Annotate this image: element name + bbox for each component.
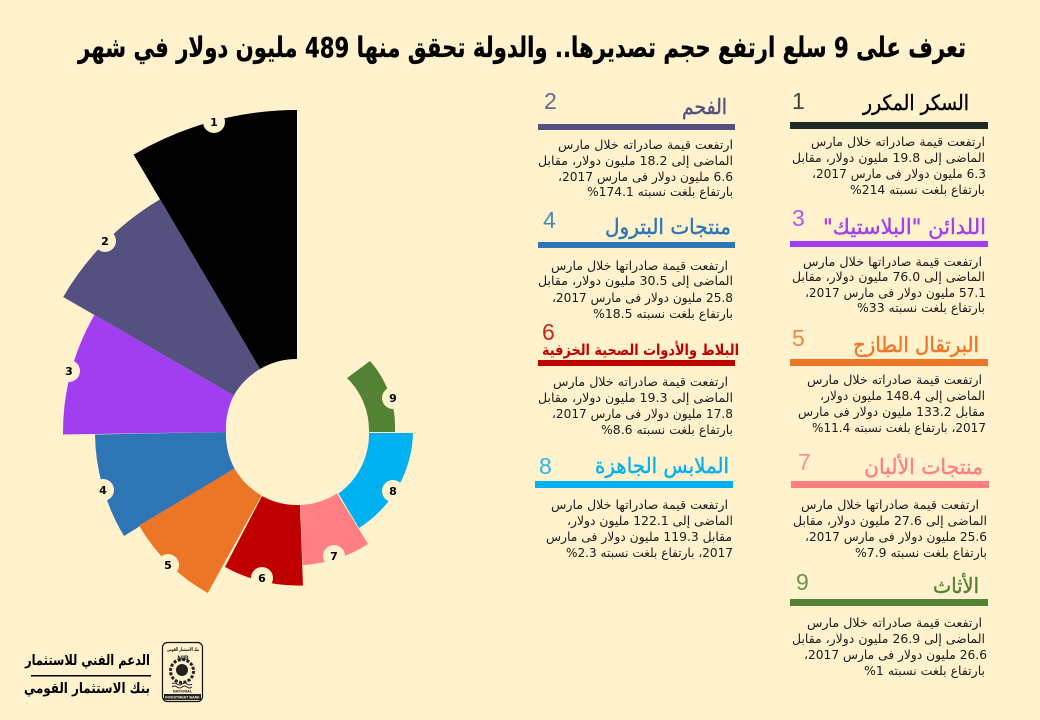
slice 8 <box>338 433 413 528</box>
bar <box>538 124 735 130</box>
text block: 6.3 مليون دولار فى مارس 2017، <box>812 166 986 182</box>
text block: 25.6 مليون دولار فى مارس 2017، <box>805 529 987 545</box>
text block: ارتفعت قيمة صادراته خلال مارس <box>807 615 982 631</box>
text block: ارتفعت قيمة صادراته خلال مارس <box>553 374 728 390</box>
slice 7 <box>300 494 368 565</box>
number: 6 <box>542 319 555 345</box>
text block: 2017، بارتفاع بلغت نسبته 2.3% <box>566 545 733 561</box>
label 9 <box>382 387 404 409</box>
label 3: 3 <box>65 365 73 378</box>
text block: ارتفعت قيمة صادراتها خلال مارس <box>551 497 728 513</box>
heading: الملابس الجاهزة <box>595 454 729 478</box>
text block: 57.1 مليون دولار فى مارس 2017، <box>805 285 986 301</box>
panel: 4 petroleum products <box>538 207 735 322</box>
heading: اللدائن "البلاستيك" <box>823 215 986 239</box>
text block: الماضى إلى 26.9 مليون دولار، مقابل <box>792 631 985 647</box>
panel: 1 refined sugar <box>790 88 988 198</box>
text block: ارتفعت قيمة صادراتها خلال مارس <box>803 254 982 270</box>
panel: 5 fresh oranges <box>790 325 988 436</box>
text block <box>798 372 986 436</box>
rose chart <box>58 110 413 593</box>
label 6: 6 <box>258 572 266 585</box>
number: 4 <box>543 207 556 233</box>
bar <box>790 359 988 366</box>
text block <box>538 258 733 322</box>
text block <box>538 137 733 200</box>
text block: 2017، بارتفاع بلغت نسبته 11.4% <box>812 420 986 436</box>
label 2 <box>94 230 116 252</box>
label 3 <box>58 360 80 382</box>
heading: البلاط والأدوات الصحية الخزفية <box>542 341 739 359</box>
text block <box>546 497 733 561</box>
text block <box>793 497 987 561</box>
text block: الماضى إلى 122.1 مليون دولار، <box>567 513 733 529</box>
text block: الماضى إلى 19.8 مليون دولار، مقابل <box>792 150 985 166</box>
text block: مقابل 119.3 مليون دولار فى مارس <box>546 529 732 545</box>
text block: الماضى إلى 19.3 مليون دولار، مقابل <box>538 390 733 406</box>
bar <box>791 481 989 488</box>
label 7: 7 <box>330 550 338 563</box>
bar <box>535 481 733 488</box>
text block: ارتفعت قيمة صادراتها خلال مارس <box>801 497 979 513</box>
label 4: 4 <box>99 484 107 497</box>
credit text <box>24 653 151 697</box>
heading: الفحم <box>682 95 727 120</box>
panel: 9 furniture <box>790 569 988 679</box>
panel: 3 plastics <box>790 205 988 316</box>
slice 1 <box>134 110 297 369</box>
number: 5 <box>792 325 805 351</box>
text block: الماضى إلى 148.4 مليون دولار، <box>820 388 985 404</box>
text block <box>538 374 733 438</box>
icon: National Investment Bank logo: NATIONAL <box>173 690 193 694</box>
label 7 <box>323 545 345 567</box>
heading: منتجات الألبان <box>864 454 983 479</box>
icon: National Investment Bank logo: INVESTMENT BANK <box>165 696 200 700</box>
text block: الماضى إلى 27.6 مليون دولار، مقابل <box>793 513 987 529</box>
number: 7 <box>798 449 811 475</box>
text block: 6.6 مليون دولار فى مارس 2017، <box>558 169 733 185</box>
text block: بارتفاع بلغت نسبته 8.6% <box>601 422 733 438</box>
text block: بارتفاع بلغت نسبته 33% <box>857 300 985 316</box>
text block: الماضى إلى 76.0 مليون دولار، مقابل <box>792 269 985 285</box>
label 5 <box>157 554 179 576</box>
heading: البرتقال الطازج <box>853 333 979 358</box>
text block: بارتفاع بلغت نسبته 7.9% <box>855 545 987 561</box>
text block: 26.6 مليون دولار فى مارس 2017، <box>804 647 987 663</box>
text block: 17.8 مليون دولار فى مارس 2017، <box>552 406 733 422</box>
label 2: 2 <box>101 235 109 248</box>
icon: National Investment Bank logo <box>162 642 202 702</box>
label 1 <box>203 111 225 133</box>
panel: 8 ready-made garments <box>535 453 733 561</box>
number: 3 <box>792 205 805 231</box>
text block: بارتفاع بلغت نسبته 18.5% <box>593 306 733 322</box>
text block: الماضى إلى 30.5 مليون دولار، مقابل <box>538 273 733 289</box>
bar <box>790 599 988 606</box>
text block: بارتفاع بلغت نسبته 214% <box>850 182 985 198</box>
slice 6 <box>225 496 303 586</box>
slice 3 <box>63 315 234 434</box>
slice 4 <box>95 432 234 536</box>
text block: ارتفعت قيمة صادراته خلال مارس <box>811 134 985 150</box>
slice 9 <box>347 361 395 432</box>
panel: 7 dairy products <box>791 449 989 561</box>
text block: بارتفاع بلغت نسبته 1% <box>864 663 985 679</box>
icon: National Investment Bank logo: NIB <box>177 655 189 662</box>
number: 2 <box>544 88 557 114</box>
number: 9 <box>796 569 809 595</box>
credit text: بنك الاستثمار القومي <box>24 681 150 697</box>
label 8 <box>382 480 404 502</box>
panel: 2 coal <box>538 88 735 200</box>
slice 2 <box>63 199 260 396</box>
label 1: 1 <box>210 116 218 129</box>
text block <box>792 615 987 679</box>
label 6 <box>251 567 273 589</box>
bar <box>790 241 988 247</box>
text block: 25.8 مليون دولار فى مارس 2017، <box>552 290 733 306</box>
bar <box>538 360 735 366</box>
text block: ارتفعت قيمة صادراتها خلال مارس <box>551 258 728 274</box>
heading: الأثاث <box>933 573 979 598</box>
text block: ارتفعت قيمة صادراته خلال مارس <box>558 137 733 153</box>
number: 8 <box>539 453 552 479</box>
label 4 <box>92 479 114 501</box>
icon: National Investment Bank logo: بنك الاستثمار القومي <box>167 647 199 653</box>
label 9: 9 <box>389 392 397 405</box>
text block: مقابل 133.2 مليون دولار فى مارس <box>798 404 985 420</box>
heading: منتجات البترول <box>605 215 731 239</box>
number: 1 <box>792 88 805 114</box>
bar <box>538 242 735 248</box>
text block <box>792 134 986 198</box>
bar <box>790 122 988 129</box>
label 5: 5 <box>164 559 172 572</box>
heading: السكر المكرر <box>862 91 969 115</box>
text block <box>792 254 986 316</box>
label 8: 8 <box>389 485 397 498</box>
text block: بارتفاع بلغت نسبته 174.1% <box>587 184 733 200</box>
text block: ارتفعت قيمة صادراته خلال مارس <box>807 372 982 388</box>
slice 5 <box>139 468 262 593</box>
panel: 6 tiles and ceramic sanitary ware <box>538 319 739 438</box>
text block: الماضى إلى 18.2 مليون دولار، مقابل <box>538 153 733 169</box>
title: تعرف على 9 سلع ارتفع حجم تصديرها.. والدولة تحقق منها 489 مليون دولار في شهر <box>76 31 966 64</box>
credit text: الدعم الفني للاستثمار <box>24 653 150 669</box>
